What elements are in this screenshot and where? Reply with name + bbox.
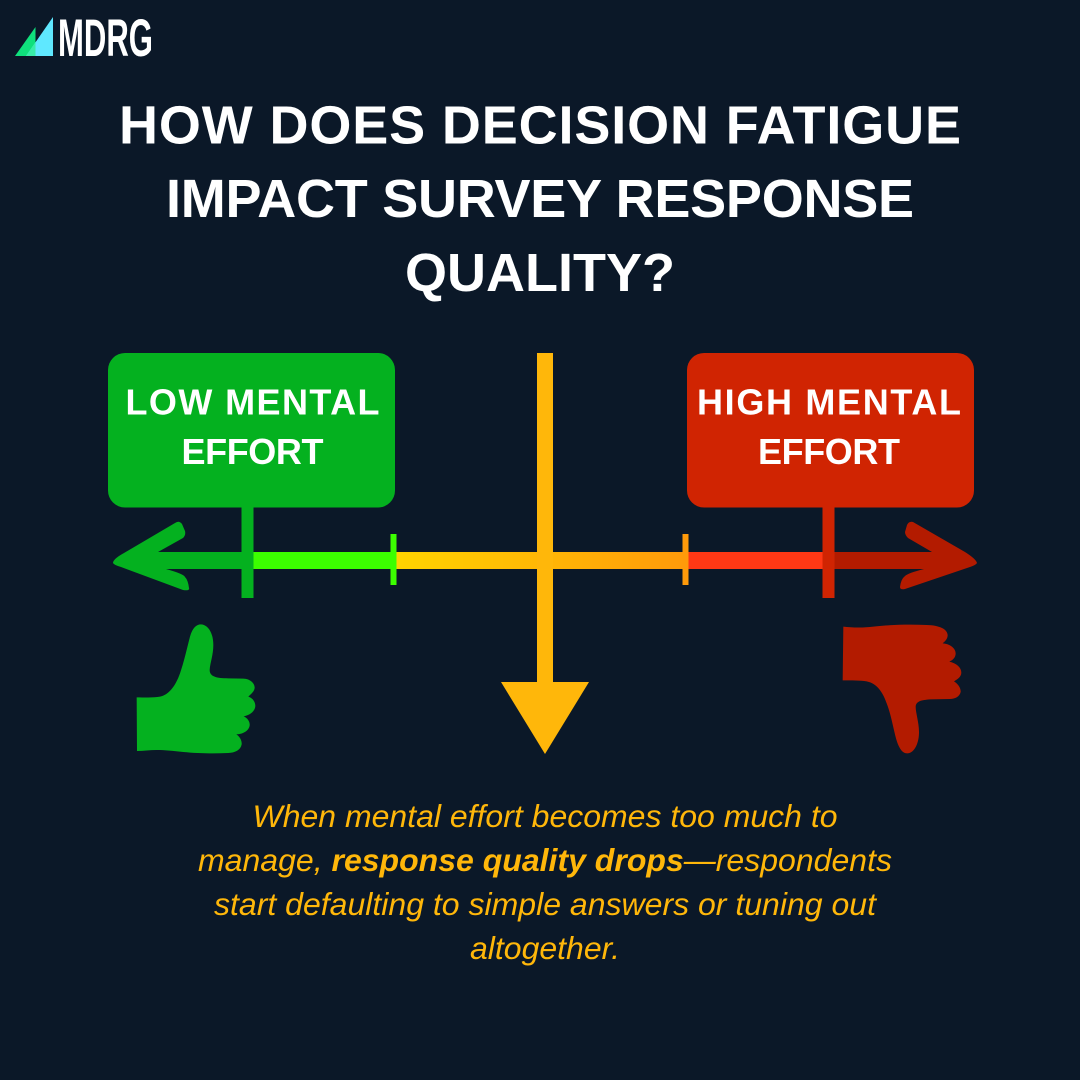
caption: When mental effort becomes too much to bbox=[252, 798, 838, 834]
caption bbox=[198, 798, 892, 966]
logo: MDRG bbox=[15, 9, 153, 68]
icon: thumbs down bbox=[843, 625, 961, 753]
tick: high boundary bbox=[682, 534, 688, 585]
arrow: central downward bbox=[501, 353, 589, 754]
title: HOW DOES DECISION FATIGUE bbox=[119, 96, 961, 156]
right arrow head and shaft bbox=[834, 522, 977, 589]
caption: manage, response quality drops—respondents bbox=[198, 842, 892, 878]
tick: low boundary bbox=[390, 534, 396, 585]
effort scale: bright green segment bbox=[253, 552, 393, 569]
panel: low mental effort: LOW MENTAL bbox=[126, 382, 380, 422]
logo: MDRG: MDRG bbox=[58, 9, 153, 68]
icon: thumbs up bbox=[137, 624, 255, 753]
title: QUALITY? bbox=[405, 243, 675, 303]
caption: altogether. bbox=[470, 930, 620, 966]
title bbox=[119, 96, 961, 303]
panel: high mental effort bbox=[687, 353, 974, 598]
panel: high mental effort: EFFORT bbox=[758, 431, 900, 472]
panel: low mental effort: EFFORT bbox=[182, 431, 324, 472]
caption: start defaulting to simple answers or tuning out bbox=[214, 886, 877, 922]
title: IMPACT SURVEY RESPONSE bbox=[166, 169, 914, 229]
panel: high mental effort: HIGH MENTAL bbox=[697, 382, 961, 422]
effort scale: bright red segment bbox=[688, 552, 824, 569]
panel: low mental effort bbox=[108, 353, 395, 598]
left arrow head and shaft bbox=[113, 522, 242, 590]
